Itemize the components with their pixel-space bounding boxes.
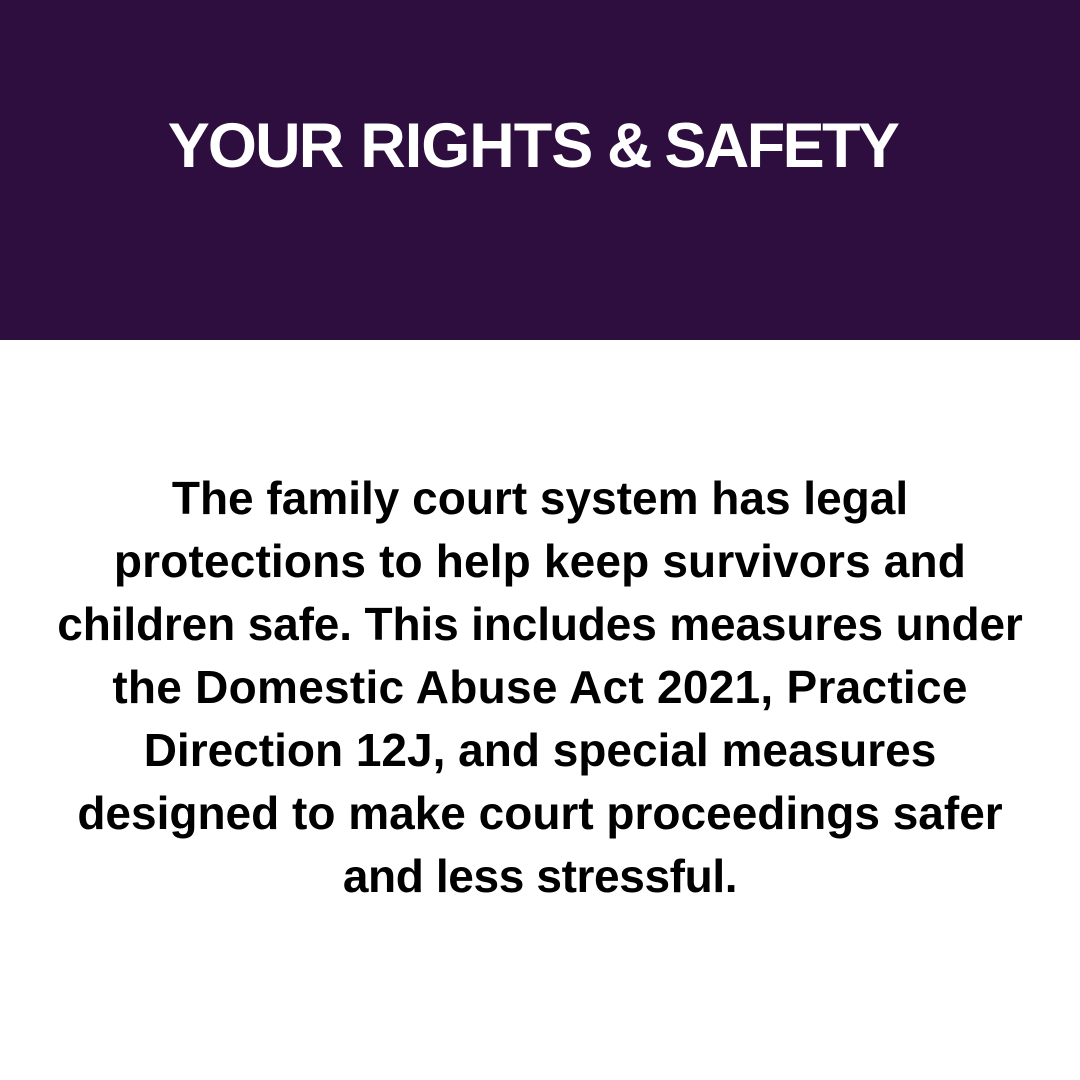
body text block: children safe. This includes measures under (57, 598, 1023, 650)
body text block: Direction 12J, and special measures (144, 724, 936, 776)
body text block: The family court system has legal (172, 472, 908, 524)
header band (0, 0, 1080, 340)
body text block: designed to make court proceedings safer (77, 787, 1003, 839)
body text block (57, 472, 1023, 902)
body text block: protections to help keep survivors and (114, 535, 966, 587)
body text block: the Domestic Abuse Act 2021, Practice (112, 661, 968, 713)
title: YOUR RIGHTS & SAFETY (168, 111, 897, 181)
body text block: and less stressful. (343, 850, 737, 902)
